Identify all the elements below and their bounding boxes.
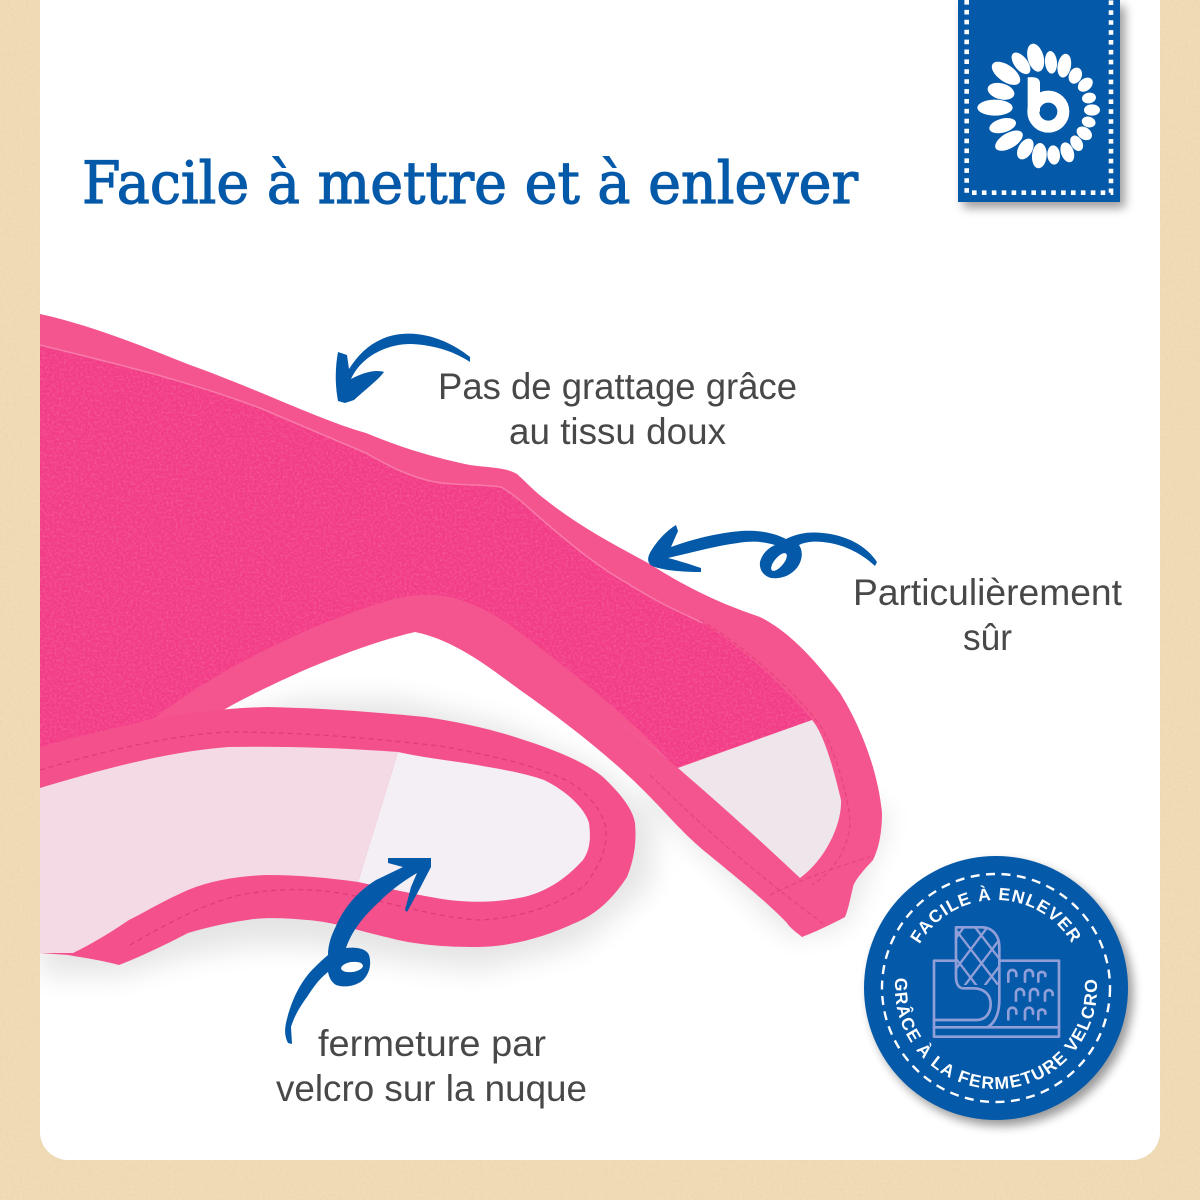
arrow: safety [648,525,877,578]
soft shadow beneath bib [40,700,890,975]
neck opening binding highlight [619,722,680,768]
caption: safety: sûr [963,617,1012,658]
bib photo [40,314,890,975]
terry texture [40,345,812,768]
caption: soft fabric: au tissu doux [509,411,726,452]
front strap binding [40,707,636,965]
bib body binding [40,314,882,937]
caption: soft fabric: Pas de grattage grâce [438,366,797,407]
title: Facile à mettre et à enlever [82,149,858,217]
front strap white velcro [358,752,590,902]
caption: safety [853,572,1123,658]
caption: velcro closure [276,1023,587,1109]
caption: safety: Particulièrement [853,572,1123,613]
top stitching [40,345,703,623]
logo flower mark [977,42,1100,169]
caption: velcro closure: velcro sur la nuque [276,1068,587,1109]
badge top text: FACILE À ENLEVER [910,885,1080,944]
icon: velcro fastening [934,922,1059,1037]
right tab stitching [650,620,870,925]
terry towelling [40,345,812,768]
neck binding band [158,595,676,768]
front strap stitching [40,732,606,945]
front strap fabric [40,747,398,953]
velcro backing triangle [678,720,841,878]
logo tag [958,0,1125,208]
badge bottom text: GRÂCE À LA FERMETURE VELCRO [894,978,1098,1090]
caption: soft fabric [438,366,797,452]
arrow: soft fabric [336,334,470,403]
arrow: velcro closure [285,858,431,1044]
badge: easy to remove [862,856,1140,1132]
caption: velcro closure: fermeture par [318,1023,546,1064]
